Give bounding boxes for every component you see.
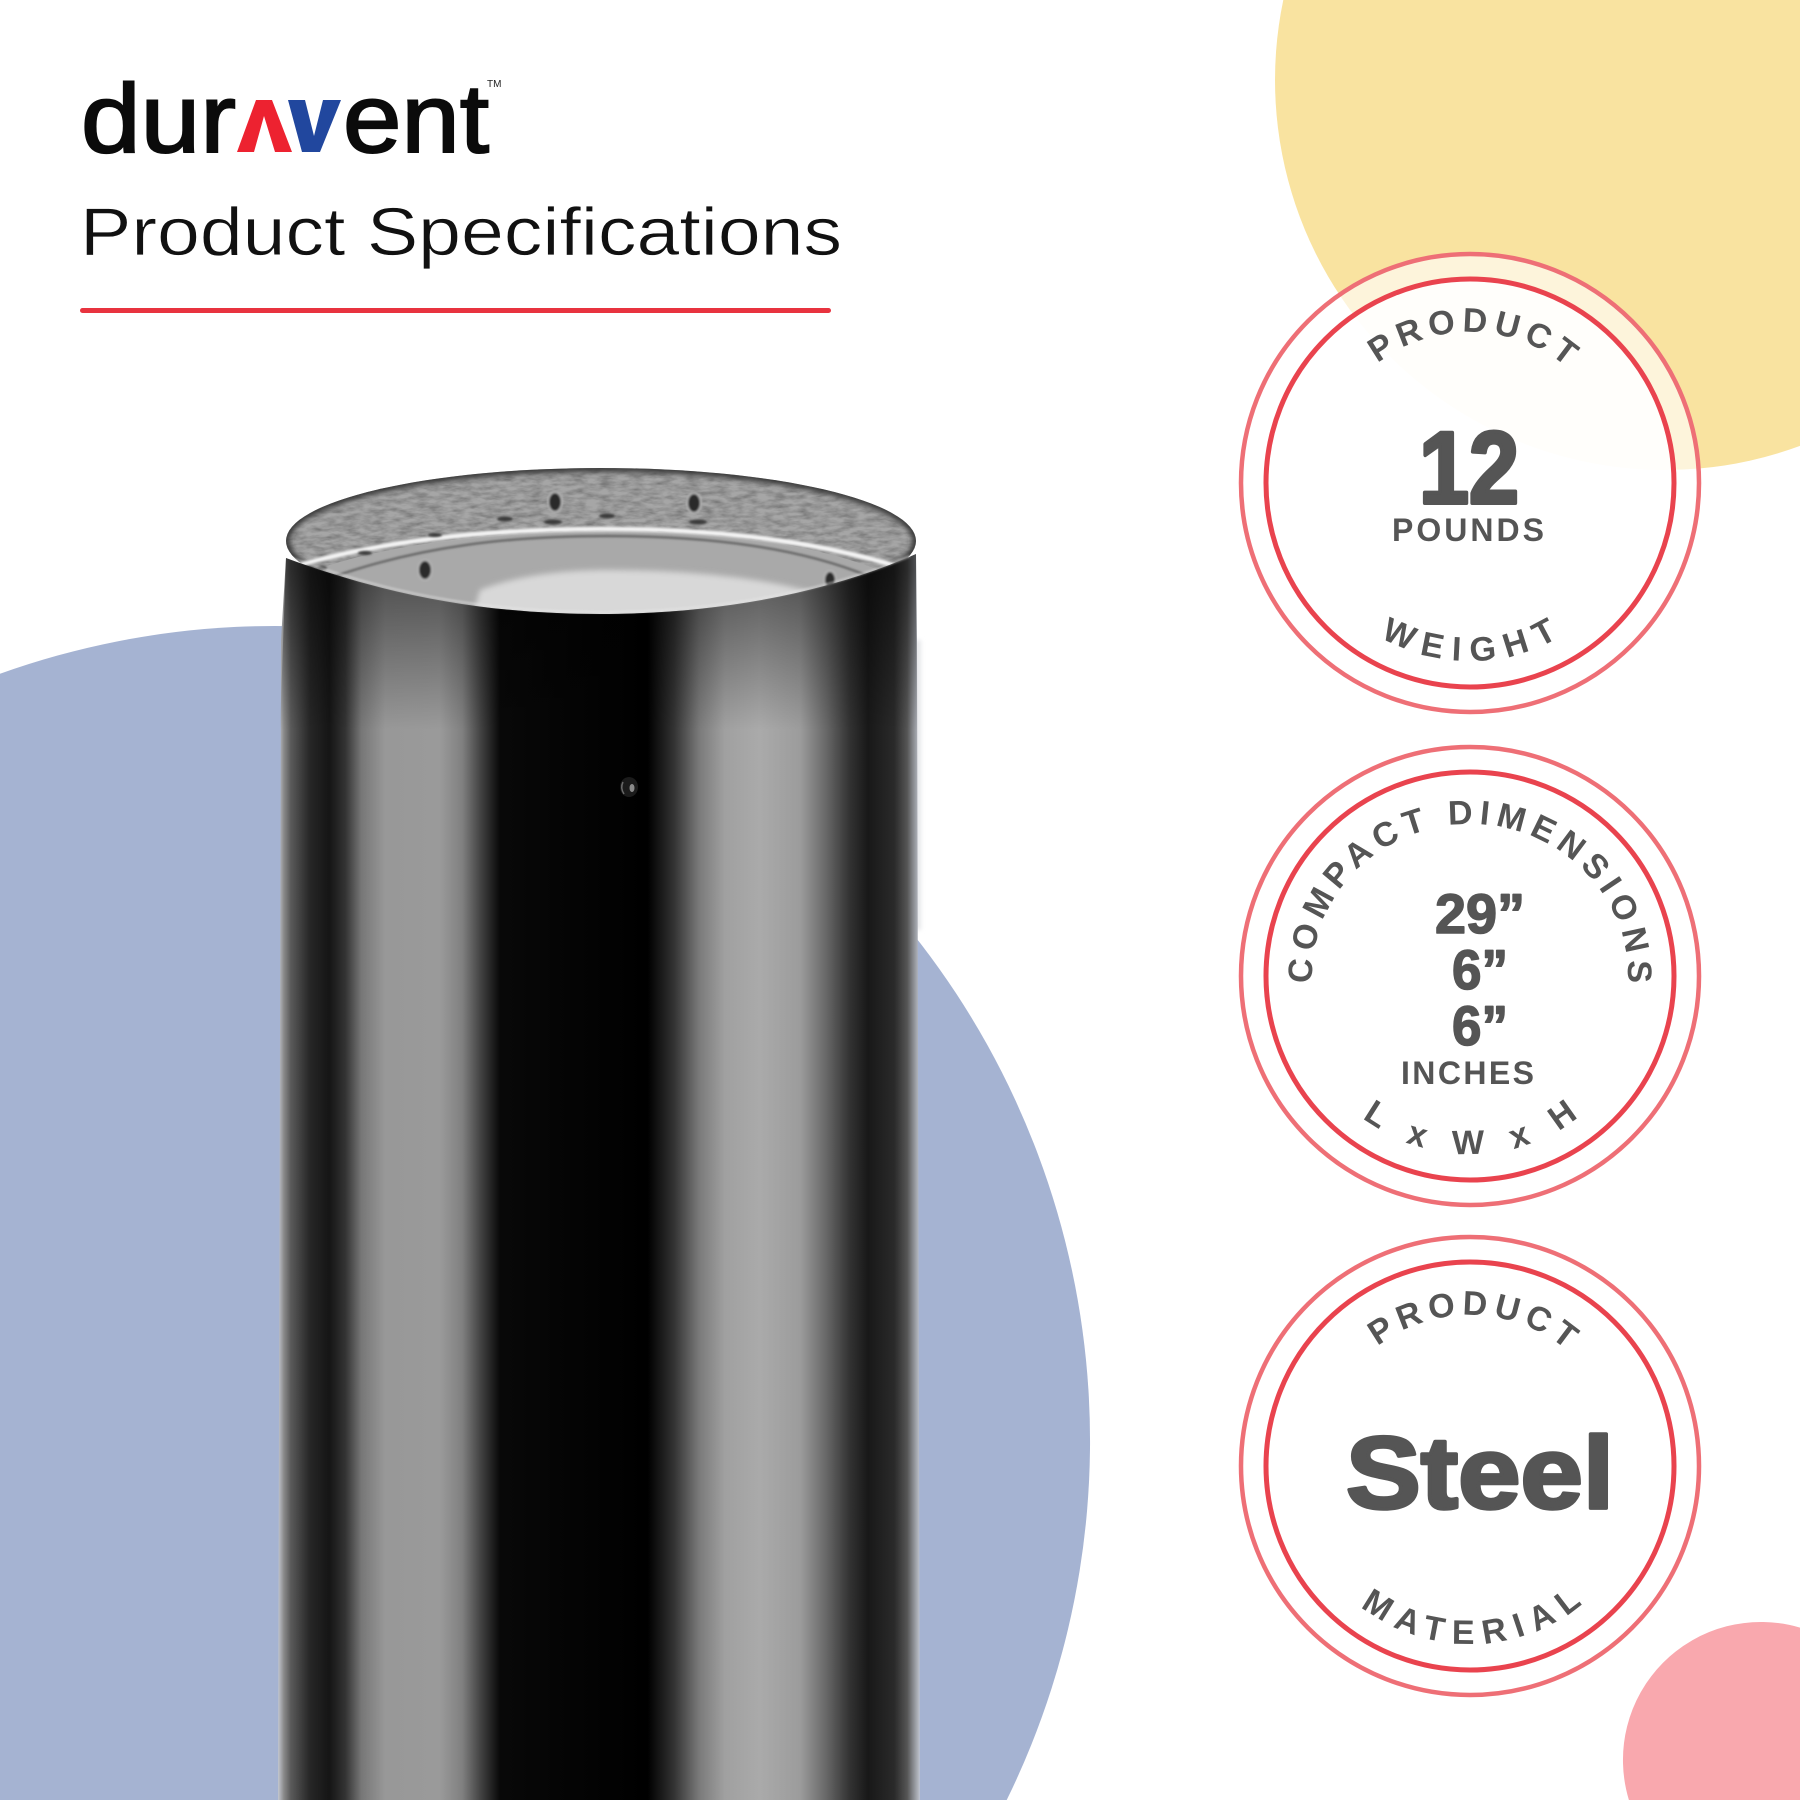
value: steel: Steel (1346, 1416, 1614, 1530)
curved label: weight: WEIGHT (1386, 616, 1552, 661)
rivet (687, 493, 701, 513)
unit: inches: INCHES (1401, 1055, 1534, 1091)
brand logo: duravent: TM (487, 79, 501, 90)
badge: product weight (1238, 252, 1702, 714)
ledge dimples (317, 514, 707, 570)
curved label: l x w x h: L x W x H (1364, 1099, 1577, 1154)
product photo: black stove pipe (278, 468, 920, 1800)
background circle: blue (0, 626, 1090, 1800)
rim dark edge (286, 468, 916, 569)
value: 12: 12 (1419, 411, 1519, 525)
curved label: product: PRODUCT (1366, 308, 1580, 362)
pipe rim back wall (286, 468, 916, 614)
brand logo: duravent (81, 64, 501, 173)
outer ring (1241, 254, 1699, 712)
heading: product specifications: Product Specifications (80, 194, 842, 270)
pipe top shading (280, 554, 917, 730)
pipe lip highlight (292, 556, 910, 612)
unit: pounds: POUNDS (1392, 512, 1544, 548)
heading underline (80, 308, 831, 313)
background circle: pink (1623, 1622, 1800, 1800)
inner ring (1266, 279, 1674, 687)
background circle: yellow (1275, 0, 1800, 470)
outer ring (1241, 747, 1699, 1205)
inner ring (1266, 1262, 1674, 1670)
badge: compact dimensions (1238, 744, 1702, 1208)
rivet (548, 492, 562, 512)
curved label: compact dimensions: COMPACT DIMENSIONS (1288, 801, 1652, 982)
pipe interior ledge (308, 531, 884, 620)
inner ring (1266, 772, 1674, 1180)
value: 6 inches: 6” (1452, 938, 1508, 1001)
pipe screw (620, 777, 638, 797)
rivet (418, 560, 432, 580)
brand logo: duravent: ent (343, 64, 489, 173)
value: 6 inches: 6” (1452, 994, 1508, 1057)
badge: product material (1238, 1234, 1702, 1698)
value: 29 inches: 29” (1435, 882, 1525, 945)
pipe interior floor (470, 570, 826, 625)
curved label: material: MATERIAL (1362, 1588, 1582, 1644)
ledge shadow (330, 536, 868, 578)
pale halo beside pipe (915, 640, 921, 930)
rivet (824, 571, 836, 589)
ledge highlight (296, 529, 896, 566)
brand logo: duravent: dur (81, 64, 236, 173)
outer ring (1241, 1237, 1699, 1695)
curved label: product: PRODUCT (1366, 1291, 1580, 1345)
pipe body (278, 554, 920, 1800)
